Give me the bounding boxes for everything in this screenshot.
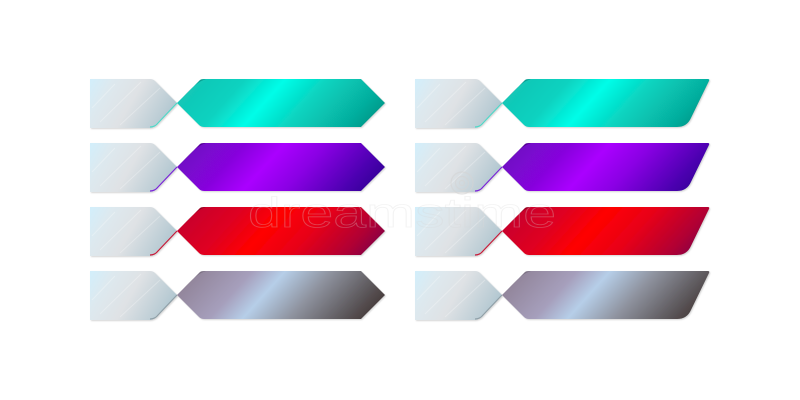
watermark xyxy=(248,172,556,236)
teal ribbon xyxy=(177,79,385,127)
row 1 left: teal banner xyxy=(90,79,385,128)
silver tab xyxy=(90,143,177,192)
silver tab xyxy=(415,79,502,128)
row 4 right: grey banner xyxy=(415,271,709,320)
red ribbon xyxy=(177,207,385,255)
watermark text: dreamstime xyxy=(248,189,556,236)
red ribbon with slanted end xyxy=(502,207,709,255)
teal ribbon with slanted end xyxy=(502,79,709,127)
purple ribbon xyxy=(177,143,385,191)
silver tab xyxy=(90,79,177,128)
purple ribbon with slanted end xyxy=(502,143,709,191)
grey ribbon xyxy=(177,271,385,319)
row 3 left: red banner xyxy=(90,207,385,256)
grey ribbon with slanted end xyxy=(502,271,709,319)
silver tab xyxy=(90,271,177,320)
row 3 right: red banner xyxy=(415,207,709,256)
silver tab xyxy=(415,271,502,320)
silver tab xyxy=(415,207,502,256)
silver tab xyxy=(415,143,502,192)
row 1 right: teal banner xyxy=(415,79,709,128)
row 2 left: purple banner xyxy=(90,143,385,192)
row 2 right: purple banner xyxy=(415,143,709,192)
silver tab xyxy=(90,207,177,256)
icon: watermark spiral xyxy=(451,172,473,194)
row 4 left: grey banner xyxy=(90,271,385,320)
